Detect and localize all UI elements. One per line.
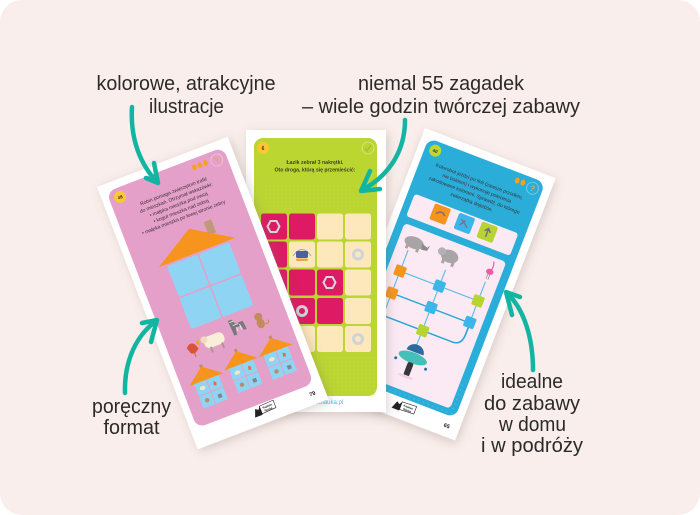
arrow: to puzzles bbox=[361, 120, 405, 191]
label: idealne do zabawy w domu i w podróży: idealne bbox=[501, 371, 563, 393]
middle card: rover puzzle bbox=[246, 130, 386, 412]
left card: house puzzle: • kogut mieszka nad zebrą bbox=[153, 198, 210, 225]
right card: robot puzzle: 40 bbox=[432, 148, 439, 154]
right card: robot puzzle: nie bokiem) i wykonuje polecenia bbox=[441, 173, 512, 205]
label: niemal 55 zagadek: niemal 55 zagadek bbox=[358, 73, 525, 95]
middle card: rover puzzle: www.kapitannauka.pl bbox=[286, 400, 343, 406]
middle card: rover puzzle: Łazik zebrał 3 nakrętki. bbox=[286, 160, 344, 166]
left card: house puzzle: ? bbox=[213, 155, 221, 165]
label: poręczny format: poręczny bbox=[92, 396, 171, 418]
left card: house puzzle: 79 bbox=[309, 391, 317, 398]
left card: house puzzle: • małpka mieszka po lewej stronie zebry bbox=[141, 199, 227, 237]
left card: house puzzle: 48 bbox=[117, 194, 124, 200]
right card: robot puzzle bbox=[324, 128, 556, 441]
left card: house puzzle: do mieszkań. Otrzymał wskazówki: bbox=[139, 182, 214, 215]
left card: house puzzle: • małpka mieszka pod owcą bbox=[149, 191, 209, 219]
label: poręczny format: format bbox=[104, 417, 160, 439]
middle card: rover puzzle: Oto droga, którą się przemieścić: bbox=[274, 168, 356, 174]
left card: house puzzle bbox=[97, 137, 328, 449]
label: idealne do zabawy w domu i w podróży: i w podróży bbox=[481, 435, 583, 457]
label: idealne do zabawy w domu i w podróży bbox=[481, 371, 583, 457]
label: niemal 55 zagadek bbox=[302, 73, 580, 118]
label: kolorowe, atrakcyjne ilustracje bbox=[96, 73, 276, 118]
left card: house puzzle: Robin pomaga zwierzętom trafić bbox=[139, 176, 209, 207]
right card: robot puzzle: zakodowane kolorami. Sprawdź, do którego bbox=[428, 175, 521, 216]
right card: robot puzzle: 65 bbox=[443, 423, 450, 430]
right card: robot puzzle: zwierzątka dojedzie. bbox=[449, 192, 493, 213]
arrow: to travel play bbox=[506, 292, 533, 370]
label: kolorowe, atrakcyjne ilustracje: kolorowe, atrakcyjne bbox=[96, 73, 276, 95]
arrow: to illustrations bbox=[132, 107, 158, 183]
right card: robot puzzle: Kolorobot jeździ po linii (zawsze przodem, bbox=[435, 163, 524, 202]
arrow: to format bbox=[125, 320, 157, 393]
label: idealne do zabawy w domu i w podróży: w domu bbox=[498, 414, 566, 436]
right card: robot puzzle: ? bbox=[529, 183, 536, 194]
label: niemal 55 zagadek: – wiele godzin twórczej zabawy bbox=[302, 96, 580, 118]
label: idealne do zabawy w domu i w podróży: do zabawy bbox=[484, 393, 580, 415]
label: kolorowe, atrakcyjne ilustracje: ilustracje bbox=[149, 96, 224, 118]
label: poręczny format bbox=[92, 396, 171, 439]
middle card: rover puzzle: 6 bbox=[262, 146, 265, 152]
